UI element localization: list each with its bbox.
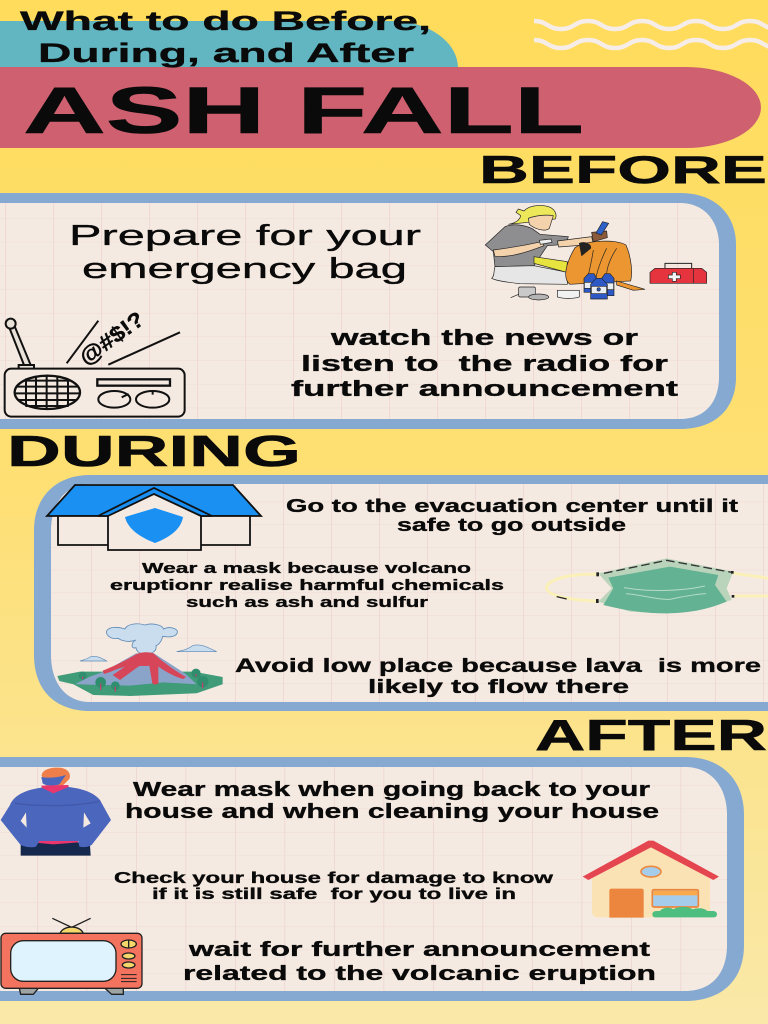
speaker grille	[15, 376, 80, 409]
text: evacuation: safe to go outside	[397, 515, 626, 535]
icon: face mask	[547, 558, 768, 613]
panel frame	[0, 193, 736, 429]
text: watch the news: further announcement	[291, 376, 679, 401]
text: check your house: if it is still safe for you to live in	[152, 886, 516, 903]
small clouds	[80, 656, 107, 661]
icon: radio	[5, 319, 185, 417]
panel frame	[34, 475, 768, 711]
text: check your house: Check your house for damage to know	[114, 870, 554, 887]
phone	[596, 222, 609, 235]
icon: house	[583, 841, 719, 918]
red title band	[0, 67, 761, 148]
shield	[125, 508, 183, 543]
icon: person packing emergency bag	[485, 205, 707, 300]
tuner	[97, 379, 170, 386]
signal lines	[67, 321, 180, 365]
panel frame	[0, 757, 744, 1001]
mountain	[75, 653, 197, 686]
orange backpack	[566, 241, 632, 284]
text: wear mask	[125, 779, 659, 823]
text: wear mask: house and when cleaning your house	[125, 801, 659, 823]
icon: television	[1, 918, 142, 994]
text: wear mask: Wear mask when going back to your	[133, 779, 650, 801]
heading: during: DURING	[7, 427, 301, 476]
text: watch the news: watch the news or	[329, 325, 639, 350]
text: wear a mask: Wear a mask because volcano	[142, 560, 471, 577]
text: emergency bag: Prepare for your	[69, 220, 422, 252]
text: evacuation: Go to the evacuation center until it	[286, 496, 738, 516]
text: wait for announcement: related to the volcanic eruption	[183, 963, 656, 985]
text: evacuation	[286, 496, 738, 535]
panel grid background	[51, 484, 768, 702]
panel: before	[0, 193, 736, 429]
text: wait for announcement	[183, 939, 656, 985]
panel: during	[34, 475, 768, 711]
text: avoid low place: likely to flow there	[368, 676, 629, 698]
panel: after	[0, 757, 744, 1001]
text: watch the news: listen to the radio for	[301, 351, 669, 376]
subtitle	[20, 6, 431, 68]
face	[528, 215, 553, 230]
text: wear a mask	[110, 560, 504, 611]
heading: before: BEFORE	[479, 149, 767, 192]
decorative white waves	[534, 21, 768, 48]
text: avoid low place: Avoid low place because lava is more	[235, 655, 761, 677]
trees	[79, 669, 208, 690]
antenna	[9, 325, 31, 365]
text: watch the news	[291, 325, 679, 401]
panel grid background	[0, 767, 727, 991]
arms and hands	[493, 242, 544, 257]
icon: man wearing mask	[1, 768, 111, 856]
ground	[57, 672, 223, 696]
radio signal symbols: @#$!?	[74, 306, 149, 370]
first aid kit	[650, 263, 707, 283]
text: check your house	[114, 870, 554, 903]
ponytail and hair	[508, 205, 556, 224]
text: avoid low place	[235, 655, 761, 698]
panel grid background	[0, 203, 719, 419]
text: emergency bag	[69, 220, 422, 285]
legs	[492, 266, 567, 284]
main title: ASH FALL	[23, 73, 584, 147]
text: wear a mask: eruptionr realise harmful chemicals	[110, 577, 504, 594]
header banner	[0, 6, 768, 148]
tins	[519, 287, 535, 297]
ash cloud	[106, 624, 177, 654]
bottles	[584, 274, 597, 292]
heading: after: AFTER	[535, 711, 767, 760]
text: wear a mask: such as ash and sulfur	[186, 594, 428, 611]
radio body	[5, 369, 185, 417]
teal subtitle shape	[0, 21, 458, 68]
icon: house with shield	[47, 485, 261, 550]
torso	[485, 225, 568, 267]
icon: erupting volcano	[57, 624, 223, 696]
subtitle: What to do Before,	[20, 6, 431, 36]
text: emergency bag: emergency bag	[82, 253, 407, 285]
dials	[98, 391, 130, 408]
yellow cloth	[534, 257, 567, 272]
subtitle: During, and After	[38, 38, 415, 68]
text: wait for announcement: wait for further announcement	[187, 939, 651, 961]
lava	[103, 652, 186, 684]
